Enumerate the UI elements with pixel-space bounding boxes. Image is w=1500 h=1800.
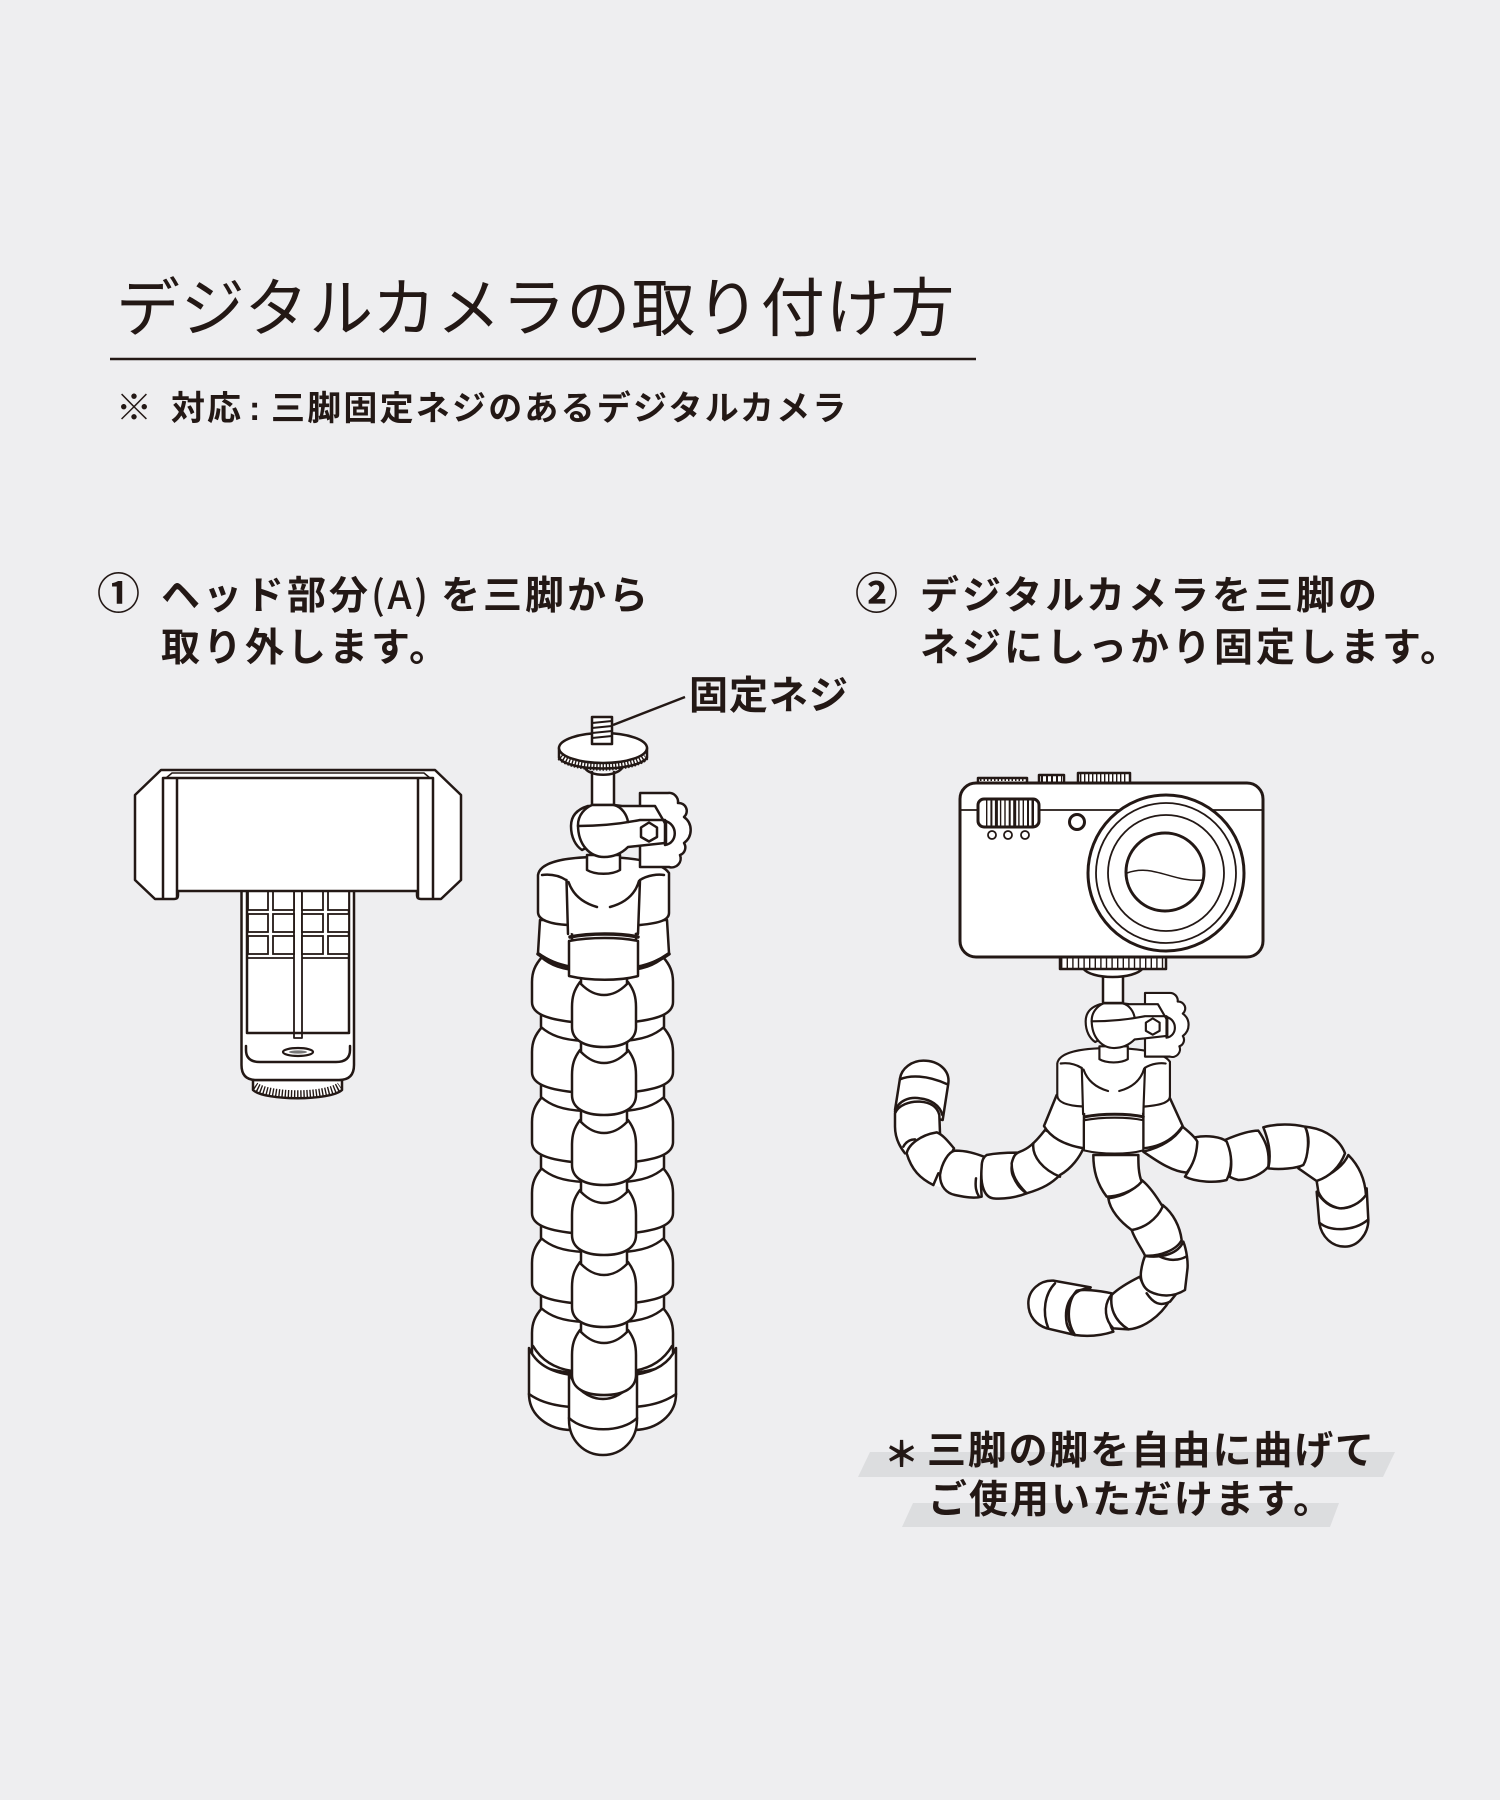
highlight bars — [858, 1452, 1395, 1527]
note text — [884, 1430, 1376, 1522]
icon: camera on tripod — [895, 773, 1368, 1336]
right leg — [1143, 1098, 1368, 1247]
centre leg — [1028, 1155, 1188, 1336]
camera top controls — [978, 773, 1130, 784]
step 2 text: ② — [855, 571, 898, 619]
icon: straight tripod — [529, 697, 691, 1455]
step 1 text: を三脚から — [441, 575, 651, 618]
step 1 text: (A) — [371, 565, 431, 621]
tripod head — [538, 772, 691, 980]
tripod legs — [895, 1061, 1368, 1336]
step 1 text: ヘッド部分 — [161, 575, 371, 618]
tripod left outer beads — [532, 945, 592, 1373]
note text: ご使用いただけます。 — [928, 1479, 1334, 1522]
camera body — [960, 783, 1263, 957]
icon: phone holder head A — [135, 770, 461, 1098]
tripod upper legs — [538, 920, 669, 968]
step 1 text: ① — [97, 571, 140, 619]
camera lens — [1088, 795, 1244, 951]
mounting disk — [559, 717, 647, 775]
step 2 text: ネジにしっかり固定します。 — [920, 627, 1462, 670]
title: デジタルカメラの取り付け方 — [116, 273, 955, 345]
left leg — [895, 1061, 1084, 1199]
camera dial — [978, 799, 1039, 839]
step 1 text — [97, 565, 651, 670]
step 2 text: デジタルカメラを三脚の — [920, 574, 1380, 618]
subtitle note: 対応 — [171, 390, 243, 428]
step 2 text — [855, 571, 1462, 670]
note text: 三脚の脚を自由に曲げて — [927, 1430, 1376, 1473]
subtitle note: 三脚固定ネジのあるデジタルカメラ — [271, 389, 848, 428]
subtitle note: ※ — [116, 387, 152, 428]
tripod feet caps — [529, 1346, 676, 1455]
camera flash — [1070, 814, 1084, 830]
tripod neck and mounting disk — [1060, 957, 1166, 1003]
step 1 text: 取り外します。 — [161, 627, 451, 670]
note text: ＊ — [884, 1436, 919, 1475]
tripod head — [1057, 975, 1189, 1154]
tripod centre beads — [572, 970, 636, 1395]
tripod right outer beads — [613, 945, 673, 1373]
label: fixing screw: 固定ネジ — [689, 675, 849, 718]
subtitle note: : — [249, 390, 260, 428]
callout line: fixing screw — [613, 697, 685, 725]
